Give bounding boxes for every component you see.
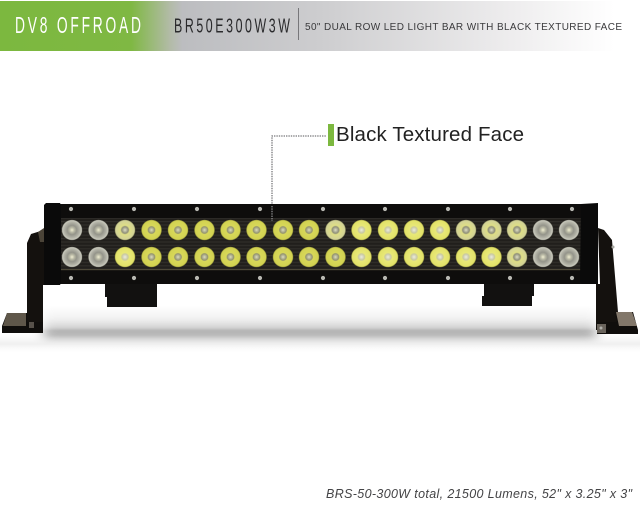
specification caption: BRS-50-300W total, 21500 Lumens, 52" x 3.25" x 3" — [326, 487, 633, 501]
leader line end over bar — [271, 206, 273, 221]
ground shadow — [0, 305, 640, 354]
callout text: Black Textured Face — [336, 123, 524, 146]
right end cap — [580, 203, 598, 284]
LED row top — [62, 220, 579, 240]
top screws — [69, 207, 574, 211]
bottom screws — [69, 276, 574, 280]
right bracket foot — [597, 312, 638, 334]
left centre mount — [105, 283, 157, 307]
bar housing — [58, 204, 582, 284]
header gradient strip — [0, 1, 640, 51]
right centre mount — [482, 283, 534, 306]
callout leader line — [272, 136, 326, 206]
left mounting bracket — [2, 228, 44, 333]
header divider — [298, 8, 299, 40]
LED row bottom — [62, 247, 579, 267]
left end cap — [44, 203, 61, 285]
brand name: DV8 OFFROAD — [15, 14, 141, 39]
lower accent line — [60, 269, 581, 270]
left bracket foot — [2, 313, 43, 333]
light bar — [44, 203, 598, 285]
model number: BR50E300W3W — [174, 14, 290, 37]
callout: black textured face — [272, 123, 524, 206]
header band — [0, 1, 640, 51]
textured face panel — [60, 218, 581, 270]
callout green marker — [328, 124, 334, 146]
right mounting bracket — [596, 228, 638, 334]
product description: 50" DUAL ROW LED LIGHT BAR WITH BLACK TEXTURED FACE — [305, 22, 622, 33]
